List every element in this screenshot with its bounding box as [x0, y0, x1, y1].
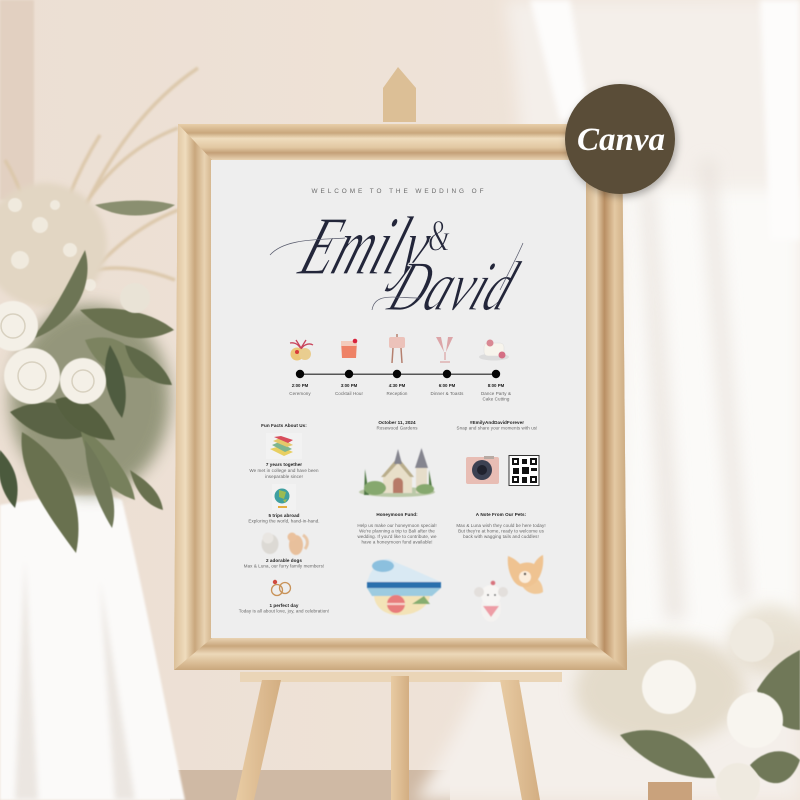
icon: globe	[272, 484, 296, 510]
heading: hashtag: Snap and share your moments with us!	[457, 426, 537, 430]
heading: welcome line: WELCOME TO THE WEDDING OF	[312, 188, 486, 195]
text: honeymoon note: Help us make our honeymoon special!	[357, 523, 437, 528]
column: fun facts	[239, 423, 329, 614]
badge: Canva: Canva	[577, 122, 665, 158]
stop: cocktail hour	[335, 339, 363, 396]
stop: reception: Reception	[387, 391, 408, 396]
stop: reception: 4:30 PM	[389, 383, 406, 388]
heading: date and venue	[376, 420, 418, 430]
easel	[236, 67, 562, 800]
wooden picture frame	[174, 124, 627, 670]
fact: perfect day: 1 perfect day	[270, 603, 299, 608]
bouquet: lower right flowers	[575, 605, 800, 800]
stop: dance party and cake cutting: 8:00 PM	[488, 383, 505, 388]
stop: dance party and cake cutting: Cake Cutting	[483, 396, 510, 402]
icon: QR code	[509, 456, 539, 486]
script names	[270, 200, 529, 326]
stop: dance party and cake cutting: Dance Party &	[481, 391, 511, 396]
illustration: beach	[367, 559, 441, 615]
fact: adorable dogs: Max & Luna, our furry family members!	[244, 564, 324, 568]
text: honeymoon note: wedding. If you'd like to contribute, we	[357, 534, 437, 539]
stop: dinner and toasts: 6:00 PM	[439, 383, 456, 388]
stop: ceremony	[289, 340, 313, 396]
column: hashtag and pets	[456, 420, 546, 622]
stop: reception	[387, 334, 408, 396]
text: pets note	[456, 523, 546, 539]
stop: cocktail hour: 3:00 PM	[341, 383, 358, 388]
icon: camera	[466, 456, 499, 484]
fact: adorable dogs	[244, 558, 324, 568]
heading: date and venue: October 11, 2024	[378, 420, 416, 425]
column: venue and honeymoon	[357, 420, 441, 615]
fact: years together: inseparable since!	[265, 474, 303, 479]
text: pets note: But they're at home, ready to welcome us	[458, 528, 545, 534]
text: pets note: Max & Luna wish they could be here today!	[456, 523, 546, 528]
timeline	[289, 334, 511, 402]
fact: years together: 7 years together	[266, 462, 302, 467]
fact: perfect day	[239, 603, 329, 614]
heading: honeymoon fund: Honeymoon Fund:	[376, 512, 418, 517]
stop: dance party and cake cutting	[479, 340, 511, 402]
illustration: chapel	[359, 448, 435, 497]
stop: cocktail hour: Cocktail Hour	[335, 391, 363, 396]
text: honeymoon note	[357, 523, 437, 544]
heading: hashtag	[457, 420, 537, 430]
illustration: corgi and white puppy	[474, 555, 543, 622]
text: honeymoon note: We're planning a trip to Bali after the	[359, 528, 435, 534]
fact: trips abroad: Exploring the world, hand-in-hand.	[248, 518, 320, 524]
fact: trips abroad	[248, 513, 320, 524]
heading: note from pets: A Note From Our Pets:	[476, 512, 527, 517]
fact: trips abroad: 5 trips abroad	[268, 513, 300, 518]
name: Emily: Emily	[288, 200, 445, 293]
stop: dinner and toasts: Dinner & Toasts	[431, 391, 464, 396]
heading: hashtag: #EmilyAndDavidForever	[470, 420, 524, 425]
text: pets note: back with wagging tails and cuddles!	[463, 534, 539, 539]
stop: ceremony: 2:00 PM	[292, 383, 309, 388]
fact: perfect day: Today is all about love, joy, and celebration!	[239, 608, 329, 614]
icon: wedding rings	[272, 580, 290, 596]
fact: years together: We met in college and have been	[249, 468, 319, 473]
stop: ceremony: Ceremony	[289, 391, 311, 396]
name: David: David	[378, 248, 529, 326]
text: honeymoon note: have a honeymoon fund available!	[361, 540, 433, 544]
sign panel	[211, 160, 586, 638]
heading: fun facts: Fun Facts About Us:	[261, 423, 307, 428]
bouquet: left floral arrangement	[0, 68, 198, 553]
stop: dinner and toasts	[431, 337, 464, 396]
fact: years together	[249, 462, 319, 479]
badge: Canva	[565, 84, 675, 194]
icon: stack of books	[266, 433, 302, 459]
icon: two dogs	[262, 532, 307, 555]
flourishes	[270, 238, 523, 310]
fact: adorable dogs: 2 adorable dogs	[266, 558, 302, 563]
heading: date and venue: Rosewood Gardens	[376, 426, 418, 430]
ampersand: &	[428, 211, 450, 260]
